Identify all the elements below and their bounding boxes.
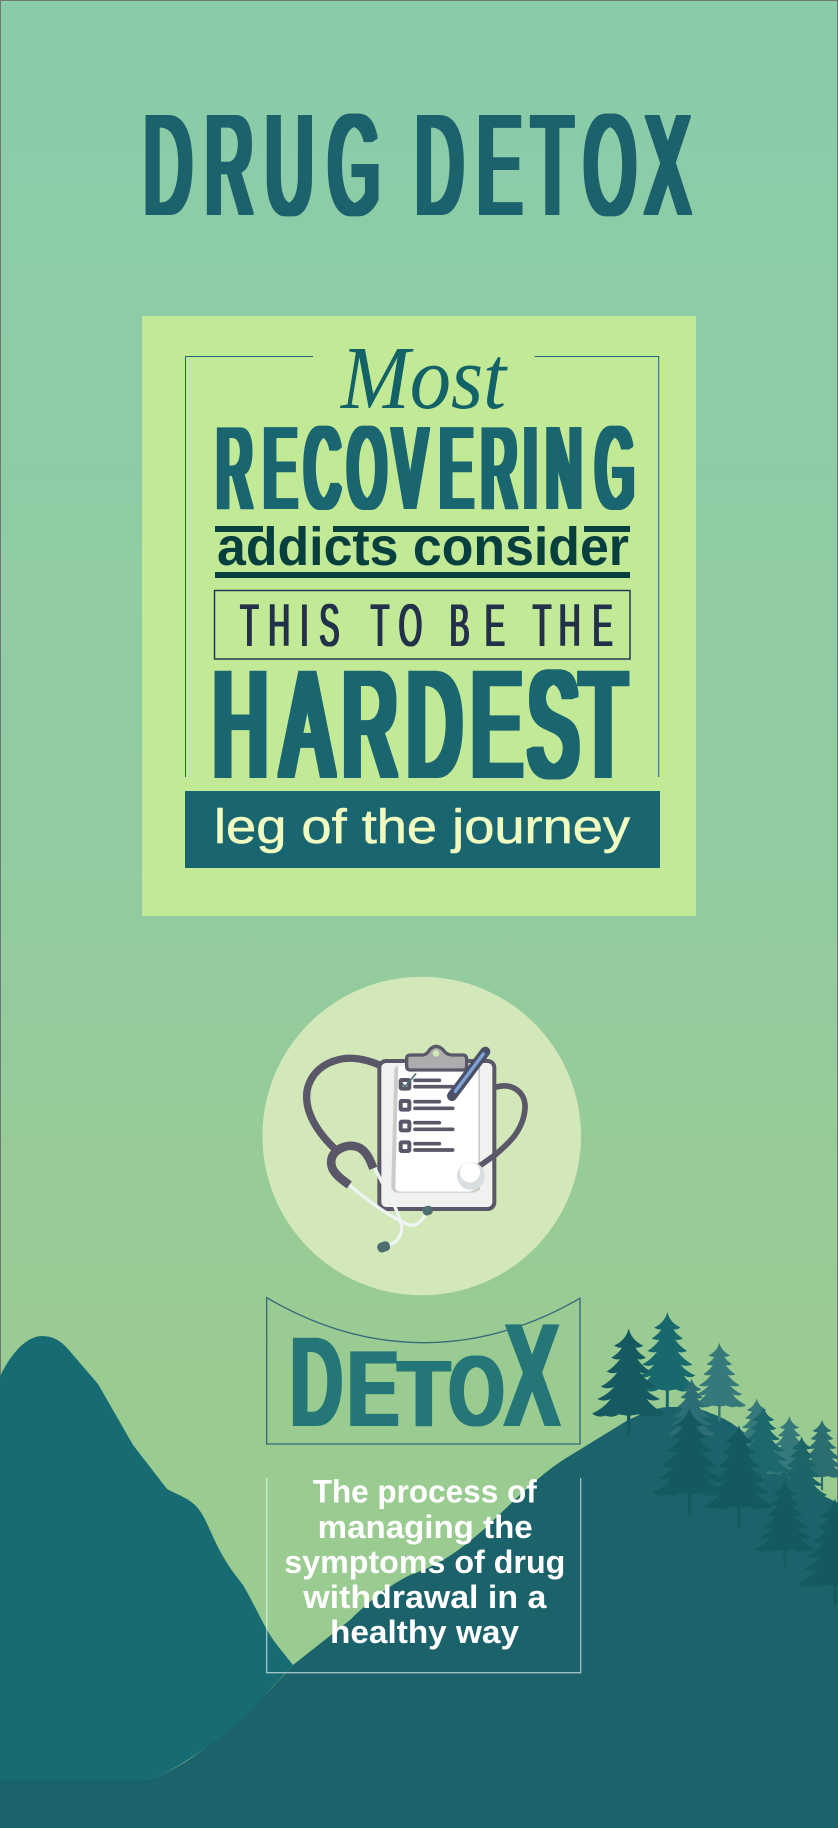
pen [452, 1052, 485, 1096]
text: addicts consider with bars: addicts consider [217, 517, 629, 577]
landscape: left mountain [0, 1336, 293, 1780]
banner: DETOX [267, 1293, 580, 1458]
chest piece [457, 1162, 485, 1190]
text box: THIS TO BE THE: THIS TO BE THE [240, 593, 613, 660]
text: Most: Most [339, 329, 508, 428]
banner: DETOX: T [397, 1342, 450, 1447]
title: DRUG DETOX [144, 86, 690, 245]
banner: DETOX: D [290, 1311, 343, 1454]
text block: definition: managing the [318, 1509, 533, 1545]
checklist rows [401, 1074, 453, 1151]
text block: definition [267, 1474, 581, 1673]
banner: DETOX: O [449, 1334, 504, 1447]
text block: definition: withdrawal in a [302, 1579, 547, 1615]
ribbon: leg of the journey [185, 791, 660, 868]
stethoscope tubes [375, 1168, 402, 1245]
text block: definition: healthy way [330, 1614, 519, 1650]
landscape: dark hill [0, 1407, 838, 1828]
text: RECOVERING: RECOVERING [217, 402, 634, 533]
icon: clipboard and stethoscope [307, 1046, 525, 1254]
trees [592, 1312, 838, 1606]
panel: hardest leg quote [142, 316, 696, 916]
text block: definition: symptoms of drug [284, 1544, 565, 1580]
banner: DETOX: X [504, 1293, 560, 1458]
ribbon: leg of the journey: leg of the journey [214, 801, 630, 854]
text block: definition: The process of [313, 1474, 537, 1510]
banner: DETOX: E [347, 1328, 399, 1450]
text: HARDEST: HARDEST [213, 642, 626, 809]
ear tips [376, 1205, 434, 1254]
icon circle backdrop [262, 977, 581, 1295]
